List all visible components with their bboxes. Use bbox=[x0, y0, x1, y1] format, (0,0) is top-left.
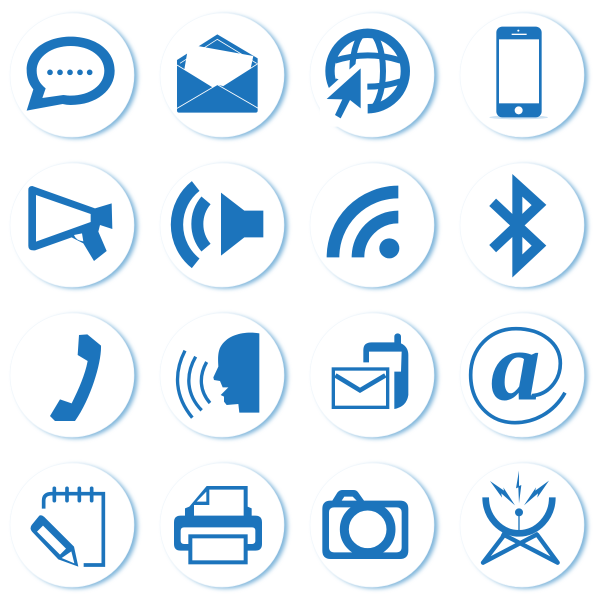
icon: at sign: a bbox=[491, 310, 541, 421]
icon: globe with cursor bbox=[320, 32, 405, 127]
icon: at sign bbox=[471, 310, 565, 423]
icon: mobile phone with envelope bbox=[333, 333, 408, 409]
row 1 bbox=[10, 13, 588, 139]
icon: bluetooth bbox=[493, 185, 539, 266]
icon: speaker with sound waves bbox=[177, 186, 263, 263]
icon: speech bubble bbox=[27, 37, 115, 111]
icon: notepad with pencil bbox=[31, 488, 103, 567]
row 2 bbox=[10, 163, 588, 289]
icon: smartphone bbox=[489, 27, 548, 119]
icon: wireless signal bbox=[333, 192, 399, 258]
icon: telephone handset bbox=[50, 334, 101, 421]
icon: printer bbox=[174, 486, 262, 562]
icon: camera bbox=[322, 490, 408, 559]
icon: satellite dish with signals bbox=[483, 471, 558, 563]
icon: speaking head bbox=[178, 333, 259, 418]
row 3 bbox=[10, 310, 588, 439]
icon: megaphone bbox=[28, 186, 112, 261]
row 4 bbox=[10, 463, 588, 589]
icon: open envelope bbox=[177, 34, 258, 113]
